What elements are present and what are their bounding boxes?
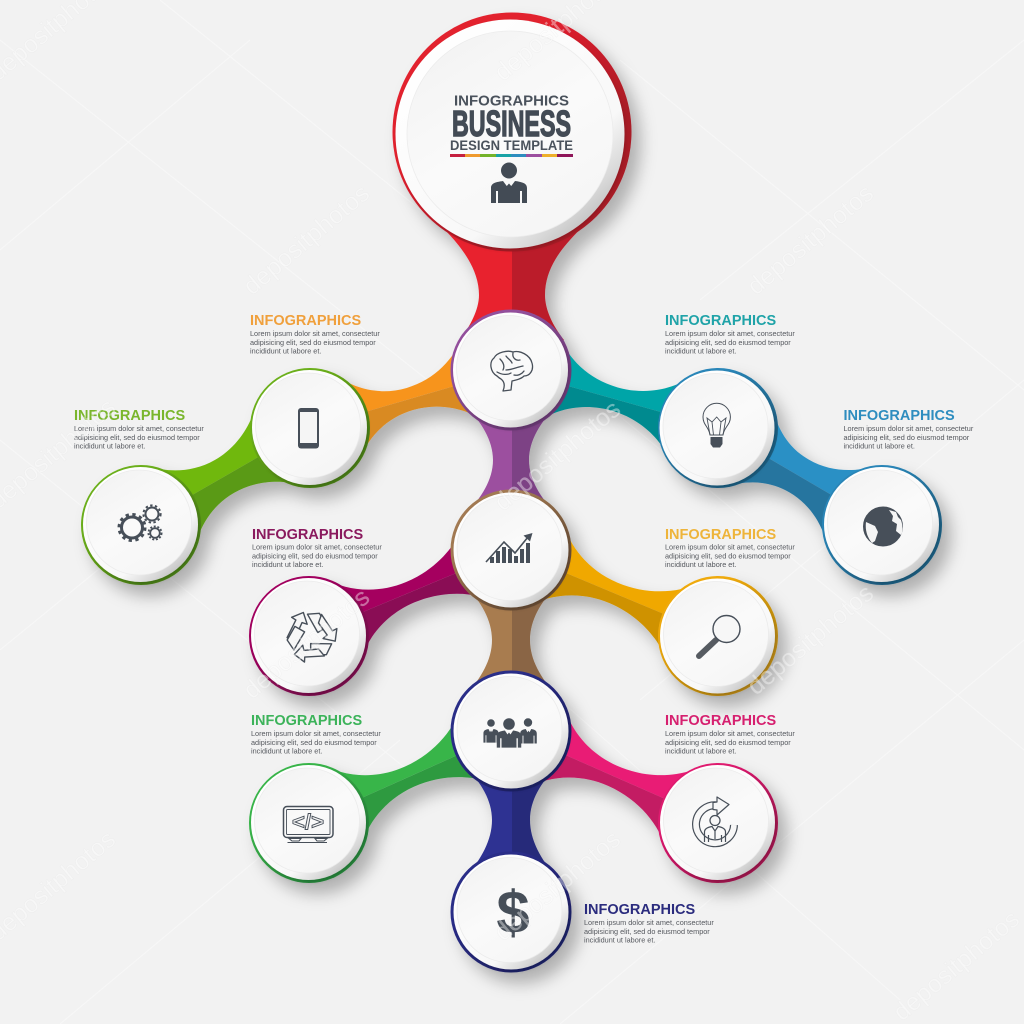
connector: purple stem [466, 370, 556, 550]
text block: magenta: Lorem ipsum dolor sit amet, consectetur [252, 542, 382, 552]
text block: orange: adipisicing elit, sed do eiusmod tempor [250, 338, 376, 347]
icon: brain [491, 351, 533, 391]
icon: smartphone [298, 408, 319, 448]
node: magnifier [660, 578, 775, 694]
coloured rings [81, 12, 942, 972]
node: recycle [251, 578, 366, 693]
node: dollar [454, 854, 568, 970]
text block: yellow [665, 527, 795, 569]
watermark: depositphotos [238, 583, 375, 705]
text block: teal: adipisicing elit, sed do eiusmod tempor [665, 338, 791, 347]
text block: navy [584, 902, 714, 944]
icon: light bulb [703, 403, 730, 448]
text block: navy: Lorem ipsum dolor sit amet, consectetur [584, 918, 714, 927]
text block: magenta: INFOGRAPHICS [252, 527, 364, 543]
text block: magenta: adipisicing elit, sed do eiusmod tempor [252, 552, 378, 560]
text block: navy: incididunt ut labore et. [584, 936, 655, 944]
text block: navy: INFOGRAPHICS [584, 902, 696, 918]
node: person with cycle arrow [660, 765, 775, 880]
connector: magenta [300, 512, 521, 673]
node: growth chart [454, 492, 568, 608]
text block: teal: Lorem ipsum dolor sit amet, consectetur [665, 329, 795, 338]
text block: blue [844, 408, 974, 450]
connector: green [299, 694, 520, 859]
node: light bulb [660, 370, 774, 486]
connector: teal [508, 329, 721, 469]
text block: blue: adipisicing elit, sed do eiusmod tempor [844, 433, 970, 442]
node: code monitor [251, 765, 366, 880]
node: gears [83, 467, 198, 582]
icon: recycle arrows [282, 611, 343, 669]
connector: yellow [503, 512, 724, 673]
connector: blue [703, 394, 895, 558]
text block: lime green: incididunt ut labore et. [74, 442, 145, 450]
node: team [454, 674, 568, 788]
heading: design template: DESIGN TEMPLATE [450, 138, 573, 153]
text block: orange: Lorem ipsum dolor sit amet, consectetur [250, 329, 380, 338]
text block: pink [665, 713, 795, 756]
text block: yellow: incididunt ut labore et. [665, 560, 736, 569]
text block: teal [665, 313, 795, 356]
icon: dollar sign: $ [496, 879, 530, 946]
diagram base: connectors and coloured rings with shadow [81, 12, 942, 972]
watermark: depositphotos [742, 179, 879, 301]
connector: lime green [126, 394, 323, 559]
text block: teal: incididunt ut labore et. [665, 346, 736, 356]
text block: magenta: incididunt ut labore et. [252, 560, 323, 569]
text block: pink: Lorem ipsum dolor sit amet, consectetur [665, 729, 795, 738]
text block: green: adipisicing elit, sed do eiusmod tempor [251, 738, 377, 747]
text block: green [251, 713, 381, 756]
main circle: title and person icon [396, 20, 624, 248]
text block: orange: INFOGRAPHICS [250, 313, 362, 329]
text block: lime green: Lorem ipsum dolor sit amet, consectetur [74, 424, 204, 433]
node: globe [824, 467, 939, 582]
icon: gears [119, 505, 162, 540]
icon: magnifying glass [699, 616, 740, 656]
text block: pink: INFOGRAPHICS [665, 713, 776, 729]
text block: blue: INFOGRAPHICS [844, 408, 955, 424]
icon: team of people [483, 718, 537, 748]
connector: orange [307, 330, 513, 468]
text block: blue: incididunt ut labore et. [844, 442, 915, 450]
text block: yellow: Lorem ipsum dolor sit amet, consectetur [665, 542, 795, 552]
text block: yellow: adipisicing elit, sed do eiusmod tempor [665, 552, 791, 560]
icon: globe [864, 507, 902, 546]
watermark: depositphotos [489, 395, 626, 517]
icon: code monitor: </> [292, 811, 324, 834]
node: brain [453, 312, 568, 428]
watermark: depositphotos [888, 905, 1024, 1024]
text block: lime green [74, 408, 204, 450]
text block: lime green: INFOGRAPHICS [74, 408, 186, 424]
text block: pink: adipisicing elit, sed do eiusmod tempor [665, 738, 791, 747]
text block: navy: adipisicing elit, sed do eiusmod tempor [584, 927, 710, 936]
rainbow bar [450, 154, 573, 157]
connector: navy stem [466, 731, 556, 912]
text block: pink: incididunt ut labore et. [665, 746, 736, 756]
text block: orange: incididunt ut labore et. [250, 346, 321, 356]
text block: green: incididunt ut labore et. [251, 746, 322, 756]
connector: red top stem [437, 132, 587, 370]
text block: blue: Lorem ipsum dolor sit amet, consectetur [844, 424, 974, 433]
icon: person cycle [696, 797, 734, 843]
heading: infographics: INFOGRAPHICS [454, 92, 569, 110]
text block: teal: INFOGRAPHICS [665, 313, 776, 329]
heading: business: BUSINESS [452, 103, 571, 144]
connector: brown stem [466, 550, 556, 731]
watermark: depositphotos [742, 579, 879, 701]
node: phone [252, 370, 367, 485]
text block: yellow: INFOGRAPHICS [665, 527, 776, 543]
text block: green: INFOGRAPHICS [251, 713, 362, 729]
connector: pink [502, 694, 723, 858]
text block: orange [250, 313, 380, 356]
watermark: depositphotos [238, 179, 375, 301]
icon: businessman [491, 162, 527, 203]
text block: green: Lorem ipsum dolor sit amet, consectetur [251, 729, 381, 738]
text block: lime green: adipisicing elit, sed do eiusmod tempor [74, 433, 200, 442]
icon: growth chart [486, 533, 532, 563]
text block: magenta [252, 527, 382, 569]
watermark: depositphotos [489, 825, 626, 947]
